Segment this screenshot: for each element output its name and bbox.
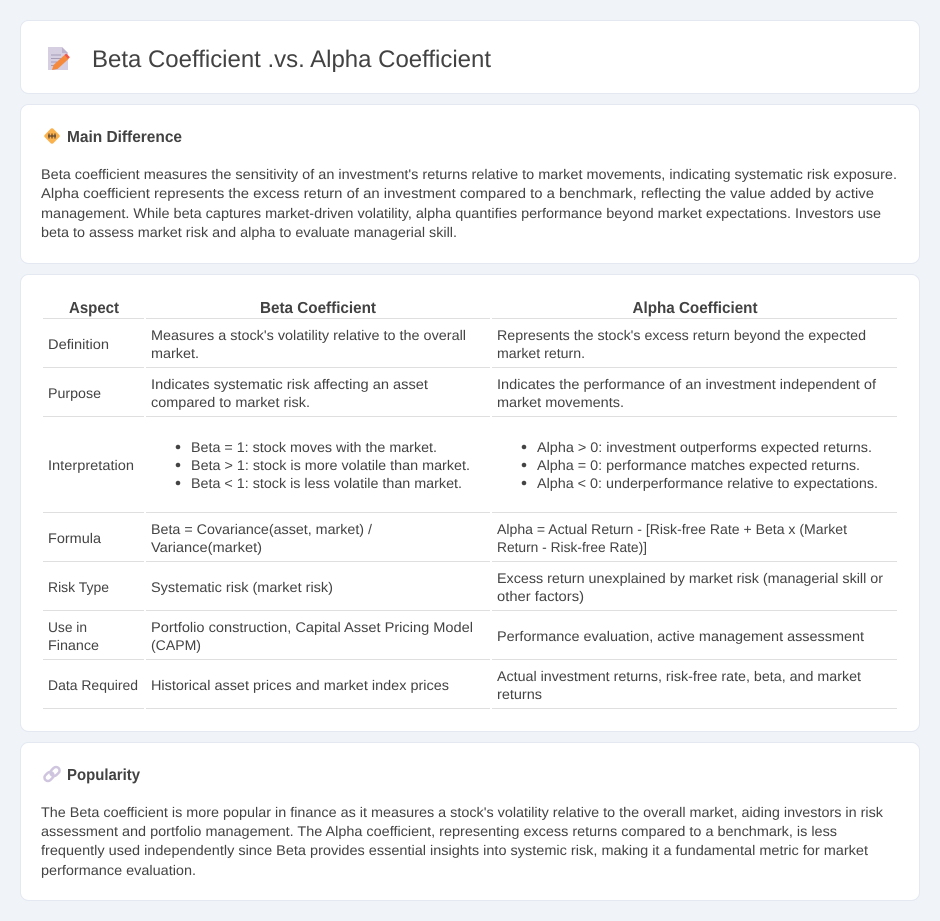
text block: main difference paragraph: management. While beta captures market-driven volatility, alpha quantifies performance beyond market expectations. Investors use: [41, 205, 881, 221]
text block: popularity paragraph: [41, 804, 884, 878]
table header row: Aspect: [69, 300, 120, 317]
table row: formula: Alpha = Actual Return - [Risk-free Rate + Beta x (Market: [497, 521, 847, 537]
panel: comparison table: [20, 274, 920, 732]
table row: data required: Data Required: [48, 677, 138, 693]
table row: definition: Represents the stock's excess return beyond the expected: [497, 327, 866, 343]
table row: interpretation: Alpha < 0: underperformance relative to expectations.: [537, 475, 878, 491]
table row: interpretation: Beta = 1: stock moves with the market.: [191, 439, 437, 455]
text block: main difference paragraph: Beta coefficient measures the sensitivity of an investment's returns relative to market movements, indicating systematic risk exposure.: [41, 166, 897, 182]
table row: formula: Variance(market): [151, 539, 262, 555]
table row: risk type: Systematic risk (market risk): [151, 579, 333, 595]
text block: main difference paragraph: [41, 166, 897, 240]
text block: popularity paragraph: The Beta coefficient is more popular in finance as it measures a stock's volatility relative to the overall market, aiding investors in risk: [41, 804, 884, 820]
table row: risk type: other factors): [497, 588, 584, 604]
table row: formula: Return - Risk-free Rate)]: [497, 539, 647, 555]
table row: interpretation: [43, 439, 897, 513]
table row: definition: Measures a stock's volatility relative to the overall: [151, 327, 466, 343]
table row: purpose: Indicates the performance of an investment independent of: [497, 376, 876, 392]
table header row: Beta Coefficient: [260, 300, 377, 317]
table row: purpose: market movements.: [497, 394, 624, 410]
table row: data required: returns: [497, 686, 542, 702]
table row: definition: market return.: [497, 345, 585, 361]
title: Beta Coefficient .vs. Alpha Coefficient: [92, 46, 491, 73]
table row: use in finance: Finance: [48, 637, 99, 653]
table row: use in finance: Use in: [48, 619, 87, 635]
table row: definition: market.: [151, 345, 199, 361]
table row: purpose: Indicates systematic risk affecting an asset: [151, 376, 428, 392]
table row: formula: Formula: [48, 530, 101, 546]
table row: use in finance: [43, 619, 897, 660]
table row: definition: [43, 327, 897, 368]
table row: use in finance: Performance evaluation, active management assessment: [497, 628, 864, 644]
table row: formula: [43, 521, 897, 562]
table row: use in finance: Portfolio construction, Capital Asset Pricing Model: [151, 619, 473, 635]
table row: definition: Definition: [48, 336, 109, 352]
table header row: [43, 300, 897, 319]
panel: popularity: [20, 742, 920, 900]
table row: use in finance: (CAPM): [151, 637, 201, 653]
heading: main difference: Main Difference: [67, 129, 182, 146]
text block: popularity paragraph: assessment and portfolio management. The Alpha coefficient, representing excess returns compared to a benchmark, is less: [41, 823, 837, 839]
icon: document with pencil: [48, 47, 70, 70]
table row: interpretation: Interpretation: [48, 457, 134, 473]
text block: main difference paragraph: Alpha coefficient represents the excess return of an investment compared to a benchmark, reflecting the value added by active: [41, 185, 874, 201]
table row: risk type: Excess return unexplained by market risk (managerial skill or: [497, 570, 883, 586]
table row: risk type: [43, 570, 897, 611]
icon: chain link: [43, 765, 61, 783]
table row: data required: [43, 668, 897, 709]
table header row: Alpha Coefficient: [632, 300, 758, 317]
table row: purpose: [43, 376, 897, 417]
table row: interpretation: Alpha > 0: investment outperforms expected returns.: [537, 439, 872, 455]
text block: main difference paragraph: beta to assess market risk and alpha to evaluate managerial skill.: [41, 224, 457, 240]
icon: warning diamond: [44, 128, 60, 144]
heading: popularity: Popularity: [67, 767, 140, 784]
table row: risk type: Risk Type: [48, 579, 109, 595]
panel: title header: [20, 20, 920, 94]
table row: data required: Actual investment returns, risk-free rate, beta, and market: [497, 668, 861, 684]
panel: main difference: [20, 104, 920, 264]
table row: interpretation: Beta < 1: stock is less volatile than market.: [191, 475, 462, 491]
table row: interpretation: Alpha = 0: performance matches expected returns.: [537, 457, 860, 473]
text block: popularity paragraph: performance evaluation.: [41, 862, 196, 878]
table row: purpose: Purpose: [48, 385, 101, 401]
table row: interpretation: Beta > 1: stock is more volatile than market.: [191, 457, 470, 473]
text block: popularity paragraph: frequently used independently since Beta provides essential insights into systemic risk, making it a fundamental metric for market: [41, 842, 868, 858]
table row: data required: Historical asset prices and market index prices: [151, 677, 449, 693]
table row: formula: Beta = Covariance(asset, market) /: [151, 521, 372, 537]
table row: purpose: compared to market risk.: [151, 394, 310, 410]
